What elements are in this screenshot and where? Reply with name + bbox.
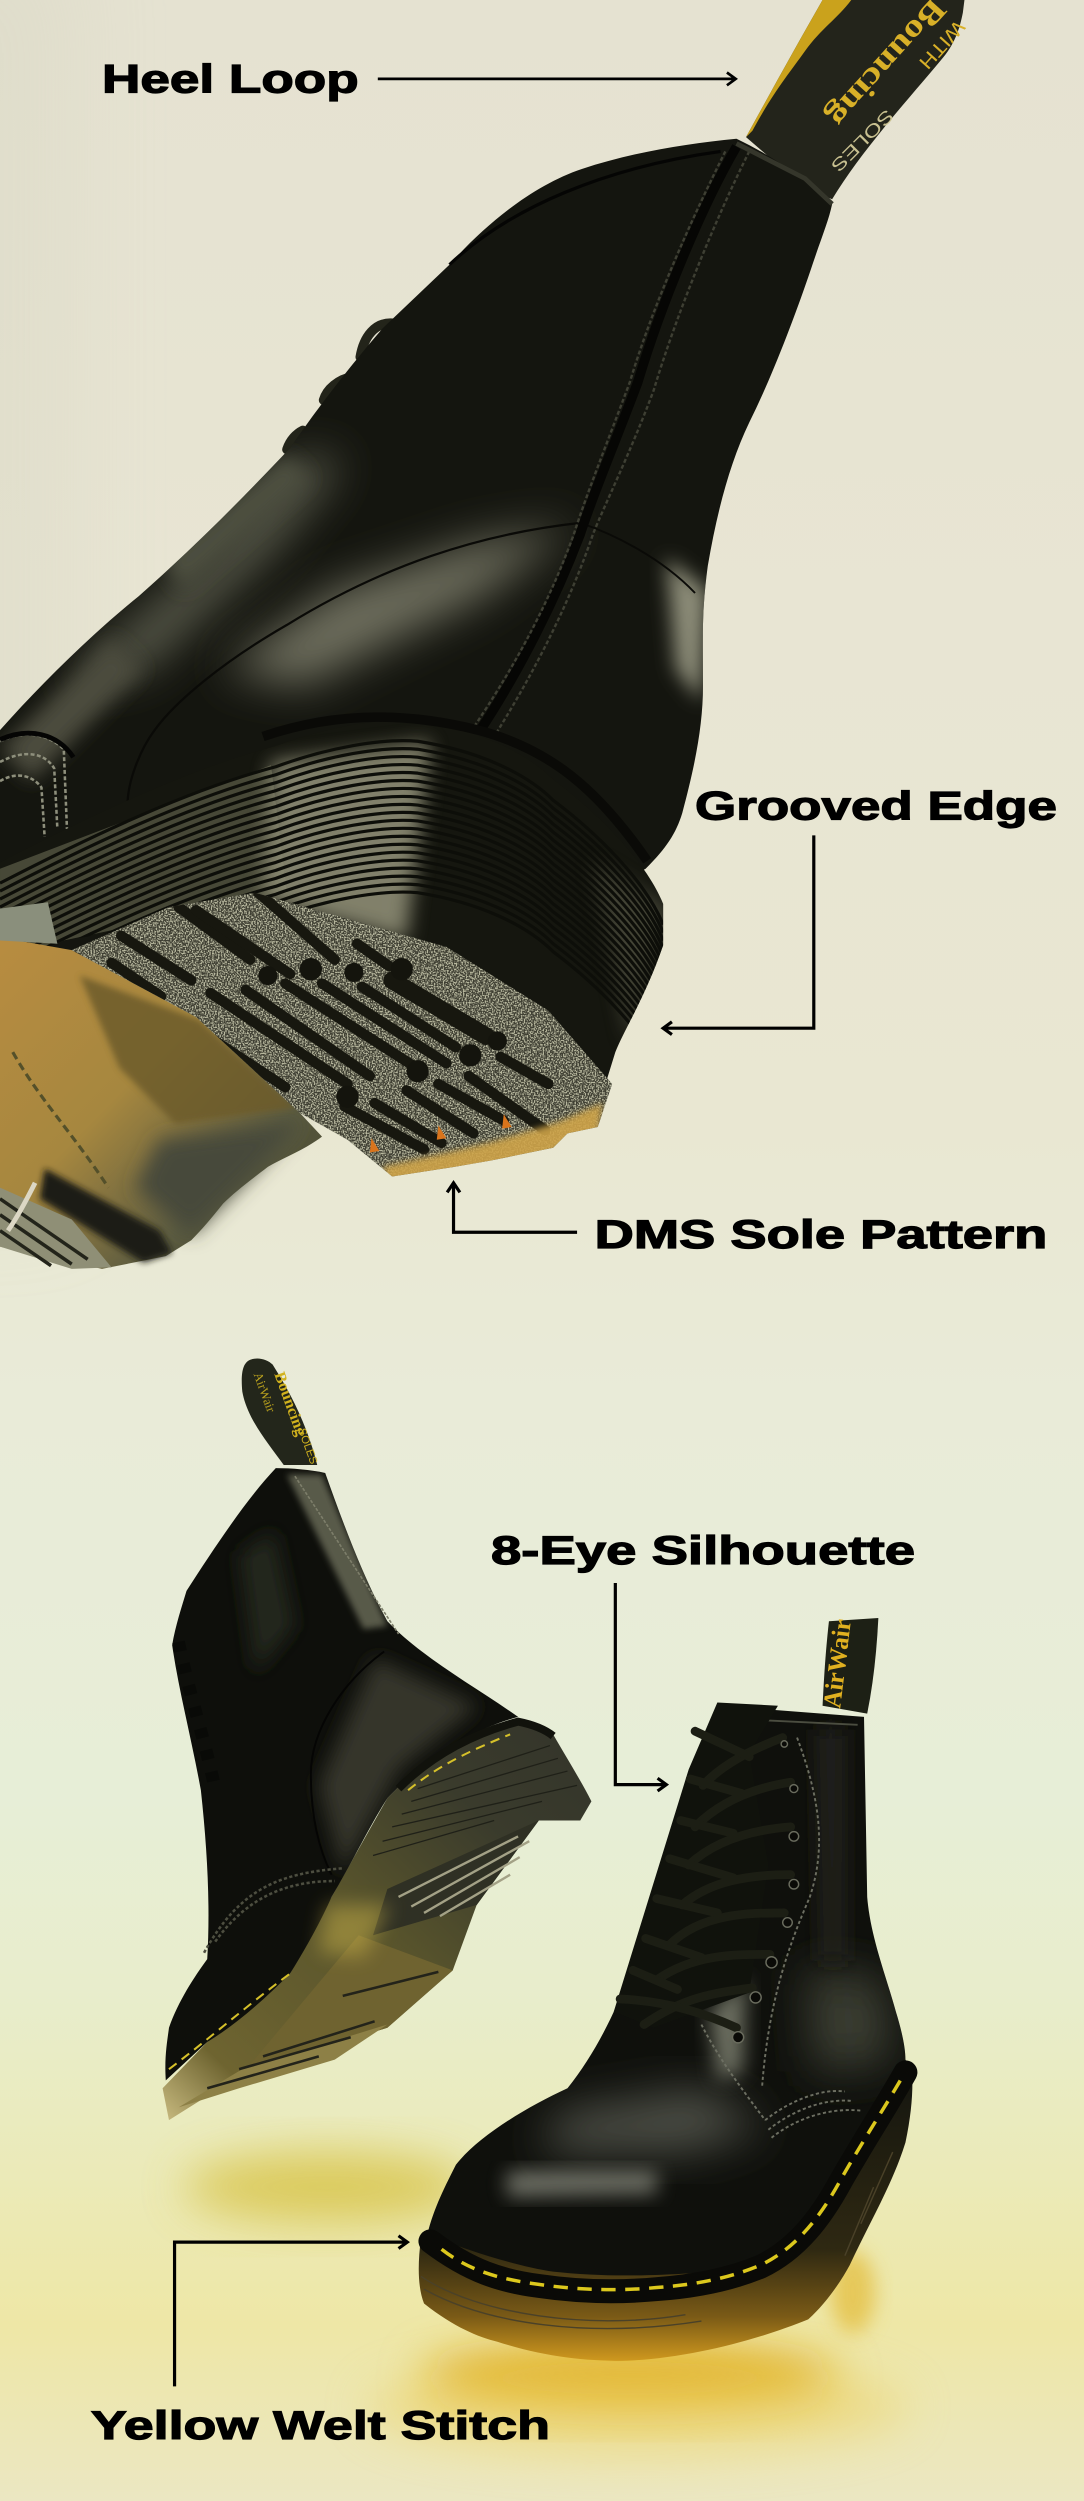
label: Yellow Welt Stitch <box>91 2236 550 2448</box>
pull tab: Bouncing <box>270 1370 309 1438</box>
grooved heel edge <box>0 717 670 1119</box>
top close-up boot <box>0 0 968 1269</box>
upper <box>427 1706 912 2275</box>
forefoot sole, translucent golden <box>0 902 322 1269</box>
label: Heel Loop <box>102 57 736 101</box>
pull tab <box>817 1617 878 1714</box>
label: Yellow Welt Stitch: Yellow Welt Stitch <box>91 2404 550 2448</box>
stitching <box>701 1718 861 2138</box>
pull tab <box>242 1358 319 1466</box>
eyelets <box>732 1741 799 2043</box>
heel loop tab <box>746 0 968 199</box>
welt and yellow stitch <box>430 2072 905 2291</box>
sole tread <box>179 1820 539 2107</box>
label: Heel Loop: Heel Loop <box>102 57 359 101</box>
label: Grooved Edge <box>663 784 1057 1035</box>
seams and laces <box>179 1476 399 1953</box>
upper <box>165 1468 518 2080</box>
laces behind the upper <box>287 323 395 450</box>
bottom left boot <box>163 1358 591 2120</box>
tongue and lace mass <box>614 1703 778 2028</box>
label: DMS Sole Pattern <box>447 1183 1047 1257</box>
arrow: Heel Loop <box>378 73 736 85</box>
arrow: Yellow Welt Stitch <box>175 2236 407 2386</box>
heel loop tab: WITH <box>914 16 968 72</box>
label: Grooved Edge: Grooved Edge <box>695 784 1057 828</box>
leather highlights <box>0 454 708 781</box>
DMS tread pattern <box>72 892 612 1176</box>
heel loop tab: SOLES <box>827 106 898 176</box>
pull tab: AirWair <box>817 1617 857 1710</box>
sole and welt base <box>419 2066 912 2361</box>
arrow: 8-Eye Silhouette <box>615 1583 666 1791</box>
label: 8-Eye Silhouette <box>491 1529 915 1791</box>
pull tab: AirWair <box>251 1370 278 1415</box>
label: DMS Sole Pattern: DMS Sole Pattern <box>595 1213 1047 1257</box>
laces <box>620 1731 791 2028</box>
highlights <box>507 1730 893 2197</box>
arrow: Grooved Edge <box>663 835 814 1035</box>
sole wedge <box>163 1718 591 2120</box>
pull tab: SOLES <box>295 1427 319 1466</box>
seams and back stitching <box>0 143 832 837</box>
bottom right boot <box>419 1617 912 2361</box>
label: 8-Eye Silhouette: 8-Eye Silhouette <box>491 1529 915 1573</box>
welt stitching <box>169 1722 553 2069</box>
arrow: DMS Sole Pattern <box>447 1183 577 1232</box>
boot upper leather <box>0 139 832 956</box>
highlights <box>239 1475 478 1873</box>
